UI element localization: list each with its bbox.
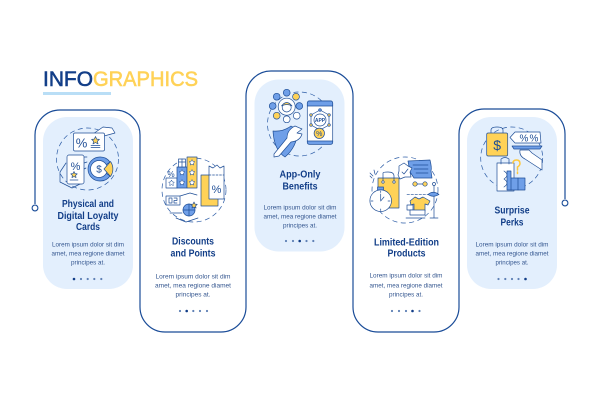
pagination dots — [497, 278, 527, 280]
heading: Surprise — [494, 206, 530, 216]
body text: Lorem ipsum dolor sit dim — [370, 272, 442, 280]
panel: discounts and points — [155, 157, 231, 312]
pagination dots — [73, 278, 102, 280]
icon: app benefits: % — [316, 131, 322, 138]
icon: app benefits — [268, 89, 333, 157]
body text: principes at. — [496, 260, 529, 266]
pagination dots — [285, 240, 314, 242]
pagination dots — [179, 310, 208, 312]
pagination dots — [391, 310, 421, 312]
icon: surprise perks: $ — [493, 137, 501, 153]
body text: principes at. — [71, 260, 105, 266]
icon: loyalty cards: % — [71, 161, 81, 173]
heading: Physical and — [62, 199, 114, 210]
body text: principes at. — [389, 292, 423, 298]
heading: and Points — [170, 248, 216, 260]
icon: surprise perks: % — [520, 134, 529, 144]
body text: principes at. — [283, 222, 317, 230]
body text: amet, mea regione diamet — [264, 214, 337, 220]
icon: loyalty cards — [56, 127, 118, 190]
heading: Limited-Edition — [374, 238, 439, 248]
heading: App-Only — [280, 170, 321, 180]
title: INFO — [43, 67, 93, 91]
icon: discounts: % — [167, 170, 175, 179]
body text: principes at. — [176, 292, 211, 298]
panel: surprise perks — [476, 127, 549, 280]
panel backgrounds — [43, 80, 557, 289]
heading: Benefits — [282, 182, 318, 192]
body text: amet, mea regione diamet — [370, 282, 443, 290]
heading: Perks — [500, 218, 524, 228]
body text: Lorem ipsum dolor sit dim — [52, 242, 124, 248]
heading: Discounts — [172, 236, 214, 248]
body text: Lorem ipsum dolor sit dim — [264, 204, 336, 212]
heading: Products — [388, 248, 426, 260]
title: GRAPHICS — [93, 67, 198, 91]
icon: discounts: % — [212, 184, 222, 196]
title underline — [43, 92, 111, 95]
icon: discounts — [162, 157, 226, 222]
panel: limited-edition products — [370, 157, 443, 312]
body text: amet, mea regione diamet — [476, 250, 549, 258]
icon: loyalty cards: $ — [96, 164, 102, 176]
icon: limited edition — [370, 157, 439, 223]
body text: Lorem ipsum dolor sit dim — [476, 242, 548, 248]
connecting outline — [32, 71, 568, 332]
icon: surprise perks — [481, 127, 543, 191]
icon: surprise perks: % — [530, 134, 539, 144]
panel: app-only benefits — [264, 89, 337, 242]
heading: Cards — [76, 222, 100, 233]
body text: amet, mea regione diamet — [155, 282, 231, 290]
icon: app benefits: APP — [315, 118, 326, 124]
body text: amet, mea regione diamet — [52, 250, 125, 258]
panel: physical and digital loyalty cards — [52, 127, 125, 280]
body text: Lorem ipsum dolor sit dim — [156, 274, 230, 280]
heading: Digital Loyalty — [58, 211, 119, 222]
icon: loyalty cards: % — [76, 136, 88, 150]
title — [43, 67, 198, 91]
